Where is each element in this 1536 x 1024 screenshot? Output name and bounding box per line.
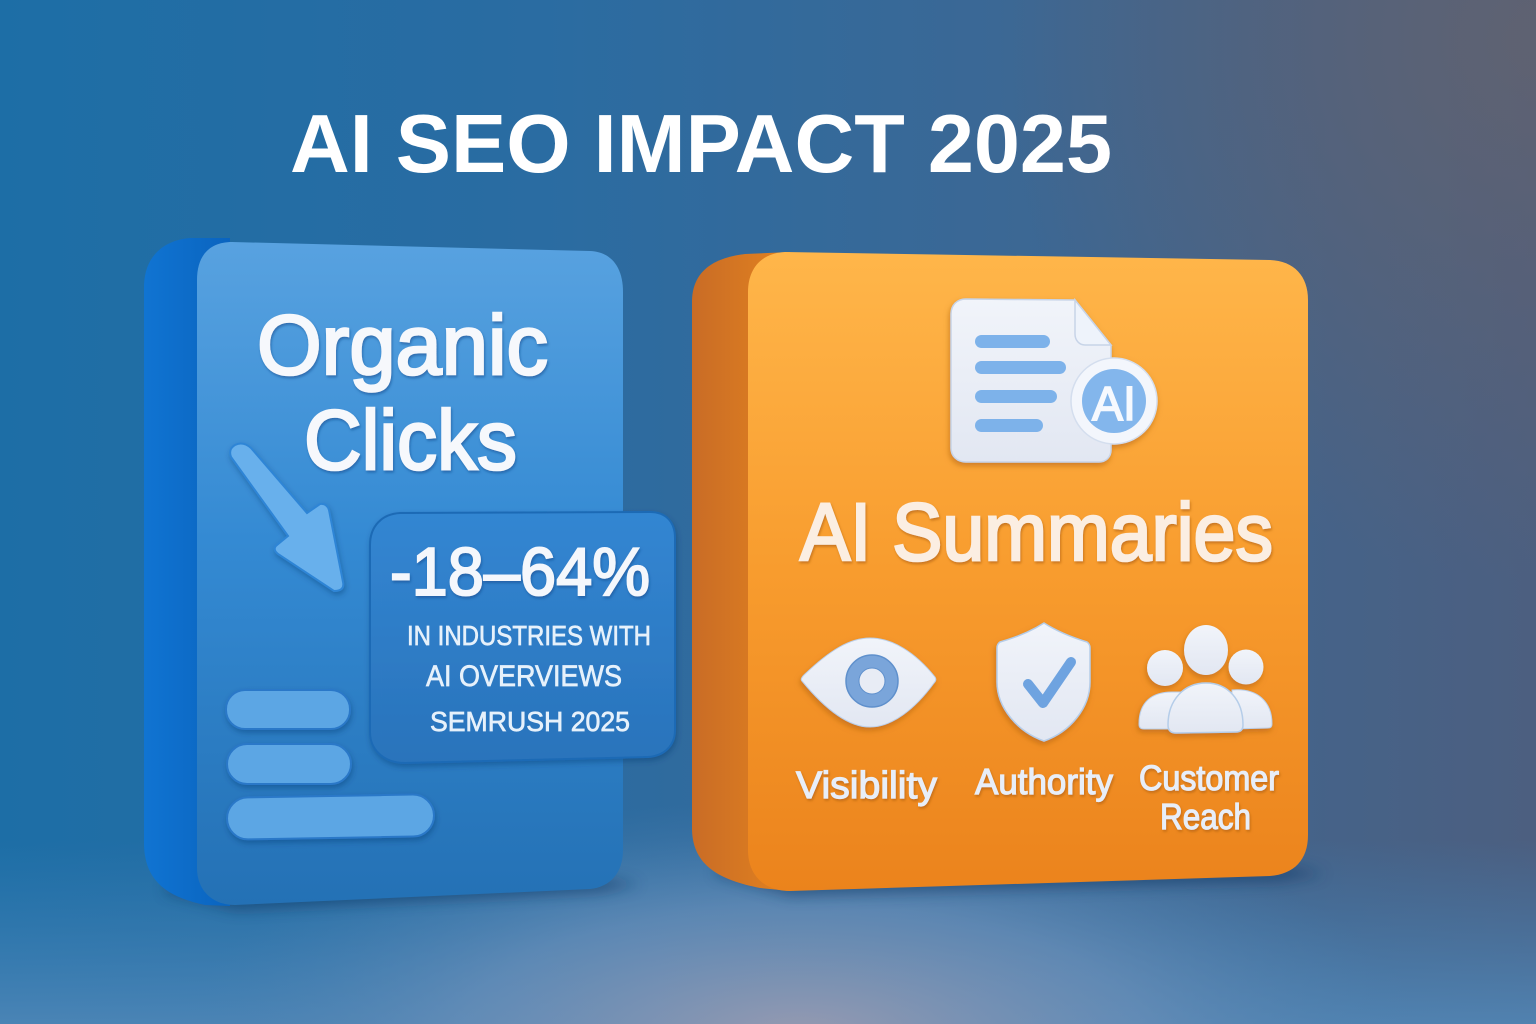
icon: people: [1139, 625, 1272, 733]
title: AI SEO IMPACT 2025: [290, 97, 1112, 190]
statistic value: -18–64%: [390, 534, 650, 610]
card side: [144, 238, 230, 906]
heading: organic clicks: Clicks: [304, 393, 517, 487]
callout: statistic: [370, 512, 675, 763]
icon: AI document: AI: [1092, 378, 1136, 431]
icon: shield: [997, 623, 1090, 741]
icon: down arrow: [230, 444, 343, 591]
statistic caption: SEMRUSH 2025: [430, 706, 630, 737]
card shadow: [165, 878, 640, 910]
icon: AI document: [951, 299, 1157, 462]
heading: organic clicks: Organic: [257, 298, 548, 392]
statistic caption: IN INDUSTRIES WITH: [407, 620, 651, 651]
card side: [692, 252, 790, 891]
card face: [748, 252, 1308, 891]
panel: organic clicks: [144, 238, 675, 910]
icon: eye: [801, 638, 936, 727]
card shadow: [715, 864, 1325, 896]
icon labels: Reach: [1160, 796, 1251, 837]
statistic caption: AI OVERVIEWS: [426, 660, 622, 693]
icon labels: Visibility: [796, 765, 937, 807]
panel: AI summaries: [692, 252, 1325, 896]
statistic caption: [407, 620, 651, 737]
card face: [197, 242, 623, 905]
icon labels: [796, 759, 1279, 837]
decorative bars: [226, 690, 434, 840]
icon labels: Authority: [975, 761, 1113, 802]
heading: AI summaries: AI Summaries: [800, 487, 1273, 578]
heading: organic clicks: [257, 298, 548, 487]
icon labels: Customer: [1139, 759, 1279, 798]
